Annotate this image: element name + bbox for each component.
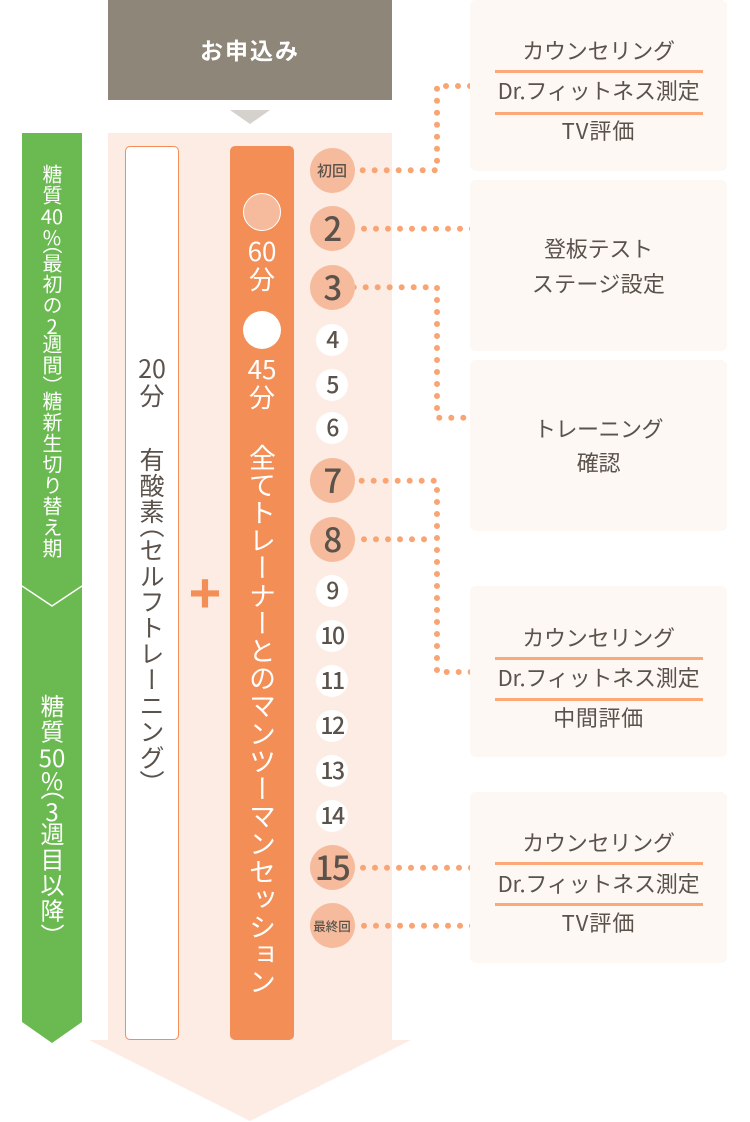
session 14 [316, 800, 348, 832]
session: final [310, 903, 354, 948]
session 15: 15 [315, 842, 349, 890]
session 13: 13 [320, 752, 344, 786]
session 9 [316, 575, 348, 607]
card: stair test and stage setting [470, 180, 727, 351]
session 5: 5 [326, 366, 338, 400]
session 2: 2 [323, 203, 341, 251]
session 4: 4 [326, 321, 338, 355]
text: second phase: 糖質 （ 週目以降 ） [35, 694, 70, 936]
session 11: 11 [320, 662, 344, 696]
session 13 [316, 755, 348, 787]
text: 45 minutes: 分 [249, 378, 275, 415]
panel: self training column [125, 146, 179, 1040]
session: first [310, 148, 354, 193]
text: one-on-one session: 全てトレーナーとのマンツーマンセッション [243, 444, 282, 996]
session 2 [310, 206, 354, 251]
card text line 2: Dr.フィットネス測定 [498, 867, 699, 899]
header box: application: お申込み [200, 32, 300, 66]
card text line 3: 中間評価 [553, 701, 644, 733]
session 14: 14 [320, 797, 344, 831]
card text line 2: Dr.フィットネス測定 [498, 661, 699, 693]
session 10: 10 [320, 617, 344, 651]
text: first phase: % [43, 222, 61, 251]
divider [495, 657, 703, 660]
card text line 1: カウンセリング [522, 621, 675, 653]
session 3: 3 [323, 262, 341, 310]
panel: trainer session column [230, 146, 294, 1040]
header box: application [108, 0, 392, 100]
card text line 2: 確認 [577, 446, 620, 478]
arrow: from application to program [230, 110, 270, 124]
card: first session evaluation [470, 0, 727, 171]
text: 60 minutes [248, 232, 276, 297]
card text line 1: トレーニング [534, 412, 663, 444]
green arrow shape [22, 133, 82, 1043]
divider [495, 698, 703, 701]
session: final: 最終回 [313, 916, 351, 935]
text: first phase: 糖質 （ 最初の 週間 ） 糖新生切り替え期 [38, 164, 67, 559]
session 6: 6 [326, 409, 338, 443]
session 12 [316, 710, 348, 742]
session 9: 9 [326, 572, 338, 606]
text: second phase: 3 [45, 793, 59, 828]
card: midpoint evaluation [470, 586, 727, 757]
session 12: 12 [320, 707, 344, 741]
text: first phase: 40 [41, 201, 63, 230]
text: second phase: % [41, 762, 63, 797]
text: first phase: 2 [46, 311, 58, 340]
panel: carbohydrate phases green arrow [22, 133, 82, 1043]
icon: 45 minute marker [243, 311, 281, 349]
icon: plus: + [189, 561, 221, 624]
text: 60 minutes: 分 [249, 260, 275, 297]
session 7 [310, 458, 354, 503]
card text line 3: TV評価 [562, 114, 635, 146]
divider [495, 903, 703, 906]
session 4 [316, 324, 348, 356]
text: 60 minutes: 60 [248, 232, 276, 269]
card text line 1: カウンセリング [522, 826, 675, 858]
session: first: 初回 [317, 160, 347, 181]
text: 45 minutes: 45 [248, 350, 276, 387]
card text line 1: カウンセリング [522, 34, 675, 66]
text: 45 minutes [248, 350, 276, 415]
session 3 [310, 265, 354, 310]
card: final evaluation [470, 792, 727, 963]
text: second phase: 50 [39, 739, 65, 774]
panel: program background arrow [90, 133, 410, 1121]
session 5 [316, 369, 348, 401]
session 11 [316, 665, 348, 697]
icon: 60 minute marker [243, 193, 281, 231]
card: training check [470, 360, 727, 531]
session 8 [310, 517, 354, 562]
card text line 3: TV評価 [562, 906, 635, 938]
session 6 [316, 412, 348, 444]
session 7: 7 [323, 455, 341, 503]
card text line 2: ステージ設定 [532, 267, 665, 299]
divider [495, 862, 703, 865]
divider [495, 70, 703, 73]
text: 20 minutes aerobic: 20 [138, 350, 166, 386]
card text line 2: Dr.フィットネス測定 [498, 74, 699, 106]
session 10 [316, 620, 348, 652]
text: 20 minutes aerobic: 分 有酸素 （ セルフトレーニング ） [134, 383, 170, 783]
session 8: 8 [323, 514, 341, 562]
divider [495, 112, 703, 115]
card text line 1: 登板テスト [544, 232, 653, 264]
